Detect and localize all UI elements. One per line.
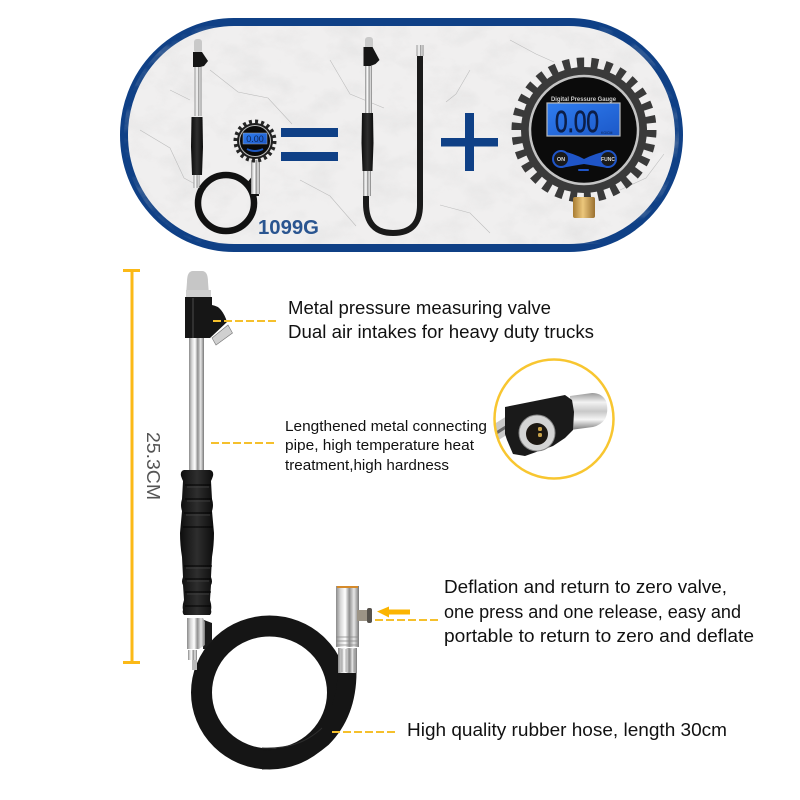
deflation valve (336, 586, 372, 673)
grip (180, 470, 214, 615)
main tool (180, 271, 372, 760)
callout: connecting pipe: Lengthened metal connecting (285, 419, 487, 435)
callout: deflation valve: portable to return to zero and deflate (444, 626, 754, 646)
gauge buttons (553, 151, 616, 171)
inset: valve close-up (490, 360, 614, 478)
callout: deflation valve: Deflation and return to zero valve, (444, 577, 727, 597)
brass connector (573, 197, 595, 218)
gauge display: KG/CM (601, 131, 613, 135)
small gauge (236, 122, 274, 160)
callout: connecting pipe: pipe, high temperature heat (285, 438, 474, 454)
marble texture (124, 26, 679, 244)
callout: connecting pipe (211, 419, 487, 474)
callout: deflation valve: one press and one release, easy and (444, 602, 741, 622)
gauge buttons: FUNC (601, 157, 615, 163)
equals sign (281, 128, 338, 161)
dimension line (123, 270, 140, 663)
arrow: points at deflation button (377, 606, 410, 618)
small gauge: 0.00 (246, 134, 264, 144)
callout: rubber hose: High quality rubber hose, length 30cm (407, 720, 727, 740)
connecting pipe (189, 336, 204, 472)
panel: product composition (124, 22, 679, 248)
plus sign (441, 113, 498, 171)
callout: connecting pipe: treatment,high hardness (285, 458, 449, 474)
digital pressure gauge (518, 64, 650, 218)
hex fitting (187, 618, 212, 670)
head (185, 297, 232, 345)
callout: measuring valve: Metal pressure measuring valve (288, 297, 551, 318)
model label: 1099G (258, 217, 319, 239)
gun and hose part (362, 37, 424, 233)
small assembled tool (191, 39, 274, 231)
gauge caption: Digital Pressure Gauge (551, 96, 616, 103)
hose (202, 626, 347, 760)
chrome tip (186, 271, 209, 295)
callout: deflation valve (375, 577, 754, 646)
callout: measuring valve: Dual air intakes for heavy duty trucks (288, 321, 594, 342)
callout: measuring valve (213, 297, 594, 342)
gauge display: 0.00 (555, 104, 599, 139)
dimension label: 25.3CM (143, 432, 163, 500)
gauge buttons: ON (557, 157, 565, 163)
